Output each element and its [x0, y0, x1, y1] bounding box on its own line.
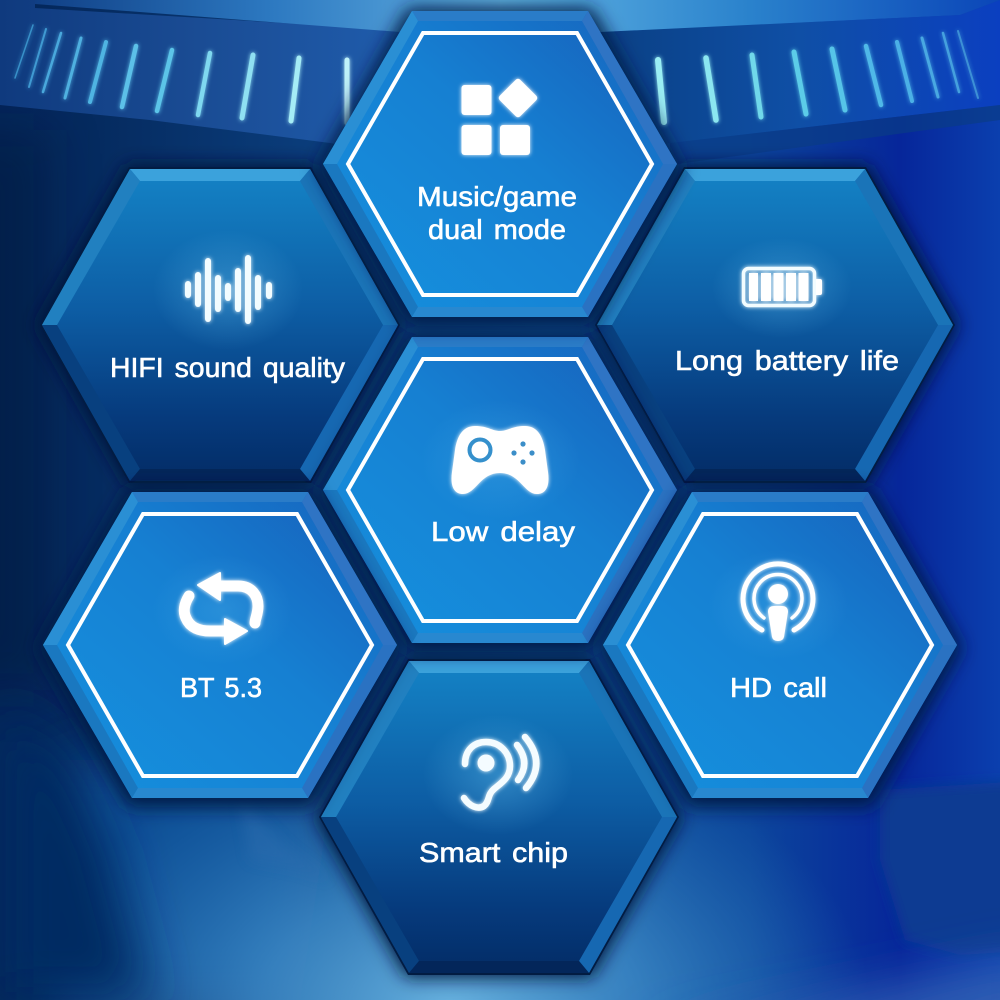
- panel: Music/game dual mode: [318, 8, 682, 326]
- ring band: left: [0, 0, 500, 155]
- panel: Smart chip: [316, 657, 682, 977]
- panel: BT 5.3: [38, 489, 402, 807]
- label: Smart chip: [419, 837, 568, 868]
- panel: Low delay: [318, 334, 682, 652]
- label: BT 5.3: [180, 672, 262, 703]
- label: Long battery life: [675, 345, 899, 376]
- icon: battery: [744, 268, 822, 306]
- panel: HIFI sound quality: [37, 165, 403, 485]
- label: dual mode: [428, 214, 566, 245]
- panel: Long battery life: [592, 165, 958, 485]
- ring band: right: [500, 0, 1000, 165]
- ring ticks: left: [15, 25, 347, 123]
- ring ticks: right: [658, 31, 978, 122]
- label: Music/game: [417, 181, 577, 212]
- icon: app grid: [462, 77, 539, 155]
- icon: loop arrows: [184, 573, 258, 644]
- icon: gamepad: [451, 426, 549, 494]
- label: HIFI sound quality: [110, 352, 345, 383]
- icon: sound wave: [188, 258, 269, 321]
- icon: ear: [464, 737, 536, 808]
- label: HD call: [730, 672, 827, 703]
- icon: podcast signal: [743, 564, 813, 641]
- label: Low delay: [431, 516, 575, 547]
- panel: HD call: [598, 489, 962, 807]
